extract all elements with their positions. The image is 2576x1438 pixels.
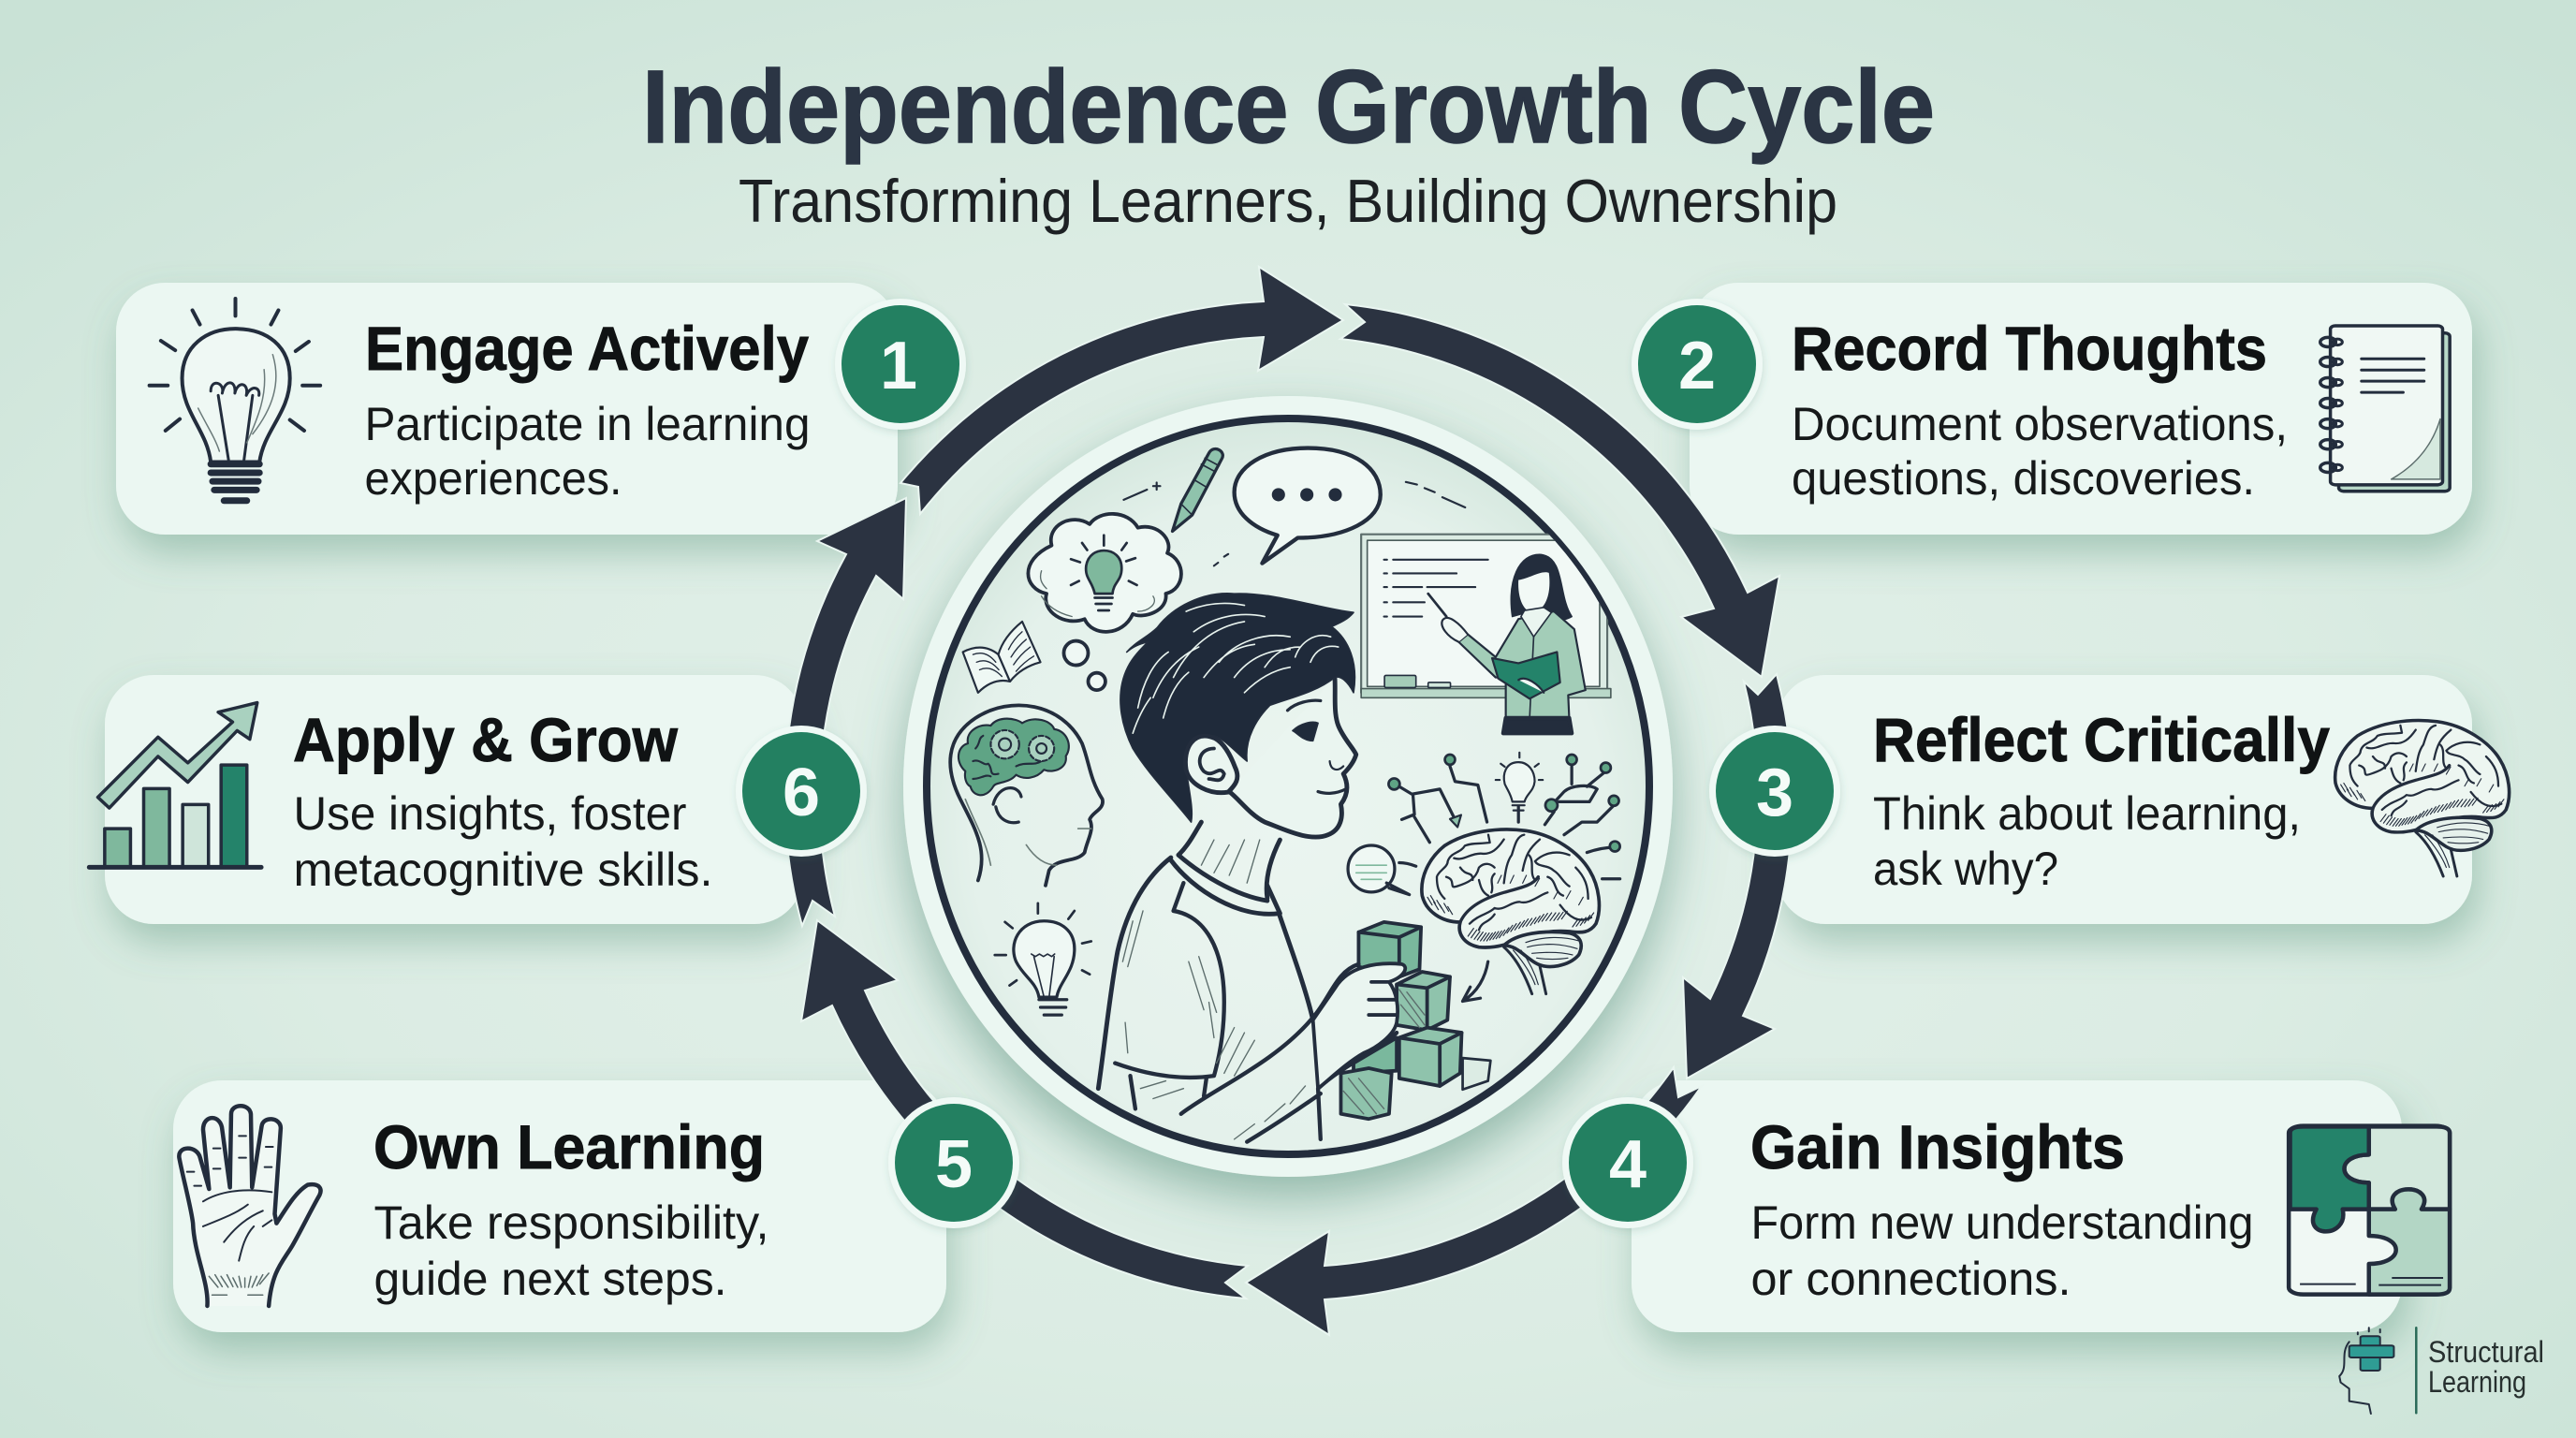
arrow: step 4 to step 5	[1246, 1067, 1702, 1335]
icon: notebook	[2320, 326, 2450, 492]
panel: engage actively	[116, 283, 898, 535]
badge: number 6	[736, 726, 867, 857]
heading: reflect critically: Reflect Critically	[1873, 705, 2330, 774]
icon: brain	[2335, 720, 2510, 876]
text: apply and grow description	[294, 787, 713, 896]
badge: number 3	[1709, 726, 1840, 857]
panel: reflect critically	[1777, 675, 2510, 924]
cycle arrows	[784, 267, 1793, 1335]
badge: number 1: 1	[880, 329, 917, 404]
text: record thoughts description: Document observations,	[1792, 398, 2288, 450]
thought cloud with bulb	[1028, 514, 1181, 690]
badge: number 5	[888, 1097, 1019, 1228]
arrow: step 3 to step 4	[1683, 674, 1793, 1078]
illustration: boy with learning icons	[950, 448, 1620, 1015]
pencil	[1123, 449, 1465, 565]
heading: apply and grow: Apply & Grow	[293, 705, 679, 774]
text: record thoughts description	[1792, 398, 2288, 505]
head profile with brain gears	[950, 705, 1103, 886]
badge: number 2	[1632, 299, 1763, 430]
badge: number 3: 3	[1756, 756, 1793, 830]
network of ideas and brain	[1348, 753, 1620, 1001]
badge: number 5: 5	[935, 1127, 973, 1202]
badge: number 1	[835, 299, 966, 430]
text: gain insights description: or connections.	[1750, 1253, 2071, 1305]
text: logo wordmark: Structural	[2428, 1335, 2544, 1369]
heading: engage actively: Engage Actively	[365, 314, 809, 383]
arrow: step 5 to step 6	[801, 920, 1248, 1299]
text: engage actively description	[365, 398, 811, 505]
arrow: step 1 to step 2	[900, 267, 1343, 514]
whiteboard with teacher	[1361, 535, 1611, 733]
subtitle: Transforming Learners, Building Ownership	[739, 167, 1837, 235]
text: apply and grow description: Use insights, foster	[294, 787, 687, 840]
building blocks	[1340, 922, 1490, 1119]
heading: gain insights: Gain Insights	[1750, 1112, 2125, 1181]
small light bulb	[995, 903, 1091, 1015]
icon: hand	[179, 1106, 320, 1306]
boy body and shirt	[1098, 855, 1405, 1142]
text: apply and grow description: metacognitive skills.	[294, 844, 713, 896]
icon: light bulb	[150, 299, 320, 501]
brain in illustration	[1422, 829, 1599, 994]
text: logo wordmark	[2428, 1335, 2544, 1399]
icon: puzzle	[2289, 1126, 2450, 1295]
logo: structural learning	[2339, 1328, 2544, 1414]
text: own learning description	[374, 1196, 769, 1305]
central illustration disc	[903, 396, 1673, 1177]
boy shading	[1122, 840, 1306, 1139]
arrow: step 2 to step 3	[1340, 304, 1779, 677]
text: gain insights description: Form new understanding	[1750, 1196, 2254, 1249]
text: reflect critically description: Think about learning,	[1873, 787, 2301, 840]
text: logo wordmark: Learning	[2428, 1365, 2526, 1399]
heading: own learning: Own Learning	[373, 1112, 765, 1181]
icon: head with cross	[2339, 1328, 2416, 1414]
heading: record thoughts: Record Thoughts	[1792, 314, 2267, 383]
text: own learning description: guide next steps.	[374, 1253, 726, 1305]
open book	[963, 622, 1041, 693]
badge: number 4	[1562, 1097, 1693, 1228]
text: own learning description: Take responsibility,	[374, 1196, 769, 1249]
panel: apply and grow	[89, 675, 803, 924]
title: Independence Growth Cycle	[642, 50, 1935, 165]
text: gain insights description	[1750, 1196, 2254, 1305]
text: engage actively description: Participate in learning	[365, 398, 811, 450]
badge: number 4: 4	[1609, 1127, 1647, 1202]
panel: gain insights	[1632, 1080, 2450, 1332]
badge: number 2: 2	[1678, 329, 1716, 404]
arrow: step 6 to step 1	[784, 498, 906, 926]
panel: record thoughts	[1690, 283, 2472, 535]
speech bubble	[1235, 448, 1381, 564]
boy head	[1120, 594, 1356, 898]
text: reflect critically description: ask why?	[1873, 843, 2058, 895]
panel: own learning	[173, 1080, 946, 1332]
text: engage actively description: experiences.	[365, 452, 622, 505]
badge: number 6: 6	[783, 756, 820, 830]
text: record thoughts description: questions, discoveries.	[1792, 452, 2255, 505]
icon: growth chart	[89, 703, 261, 867]
text: reflect critically description	[1873, 787, 2301, 895]
